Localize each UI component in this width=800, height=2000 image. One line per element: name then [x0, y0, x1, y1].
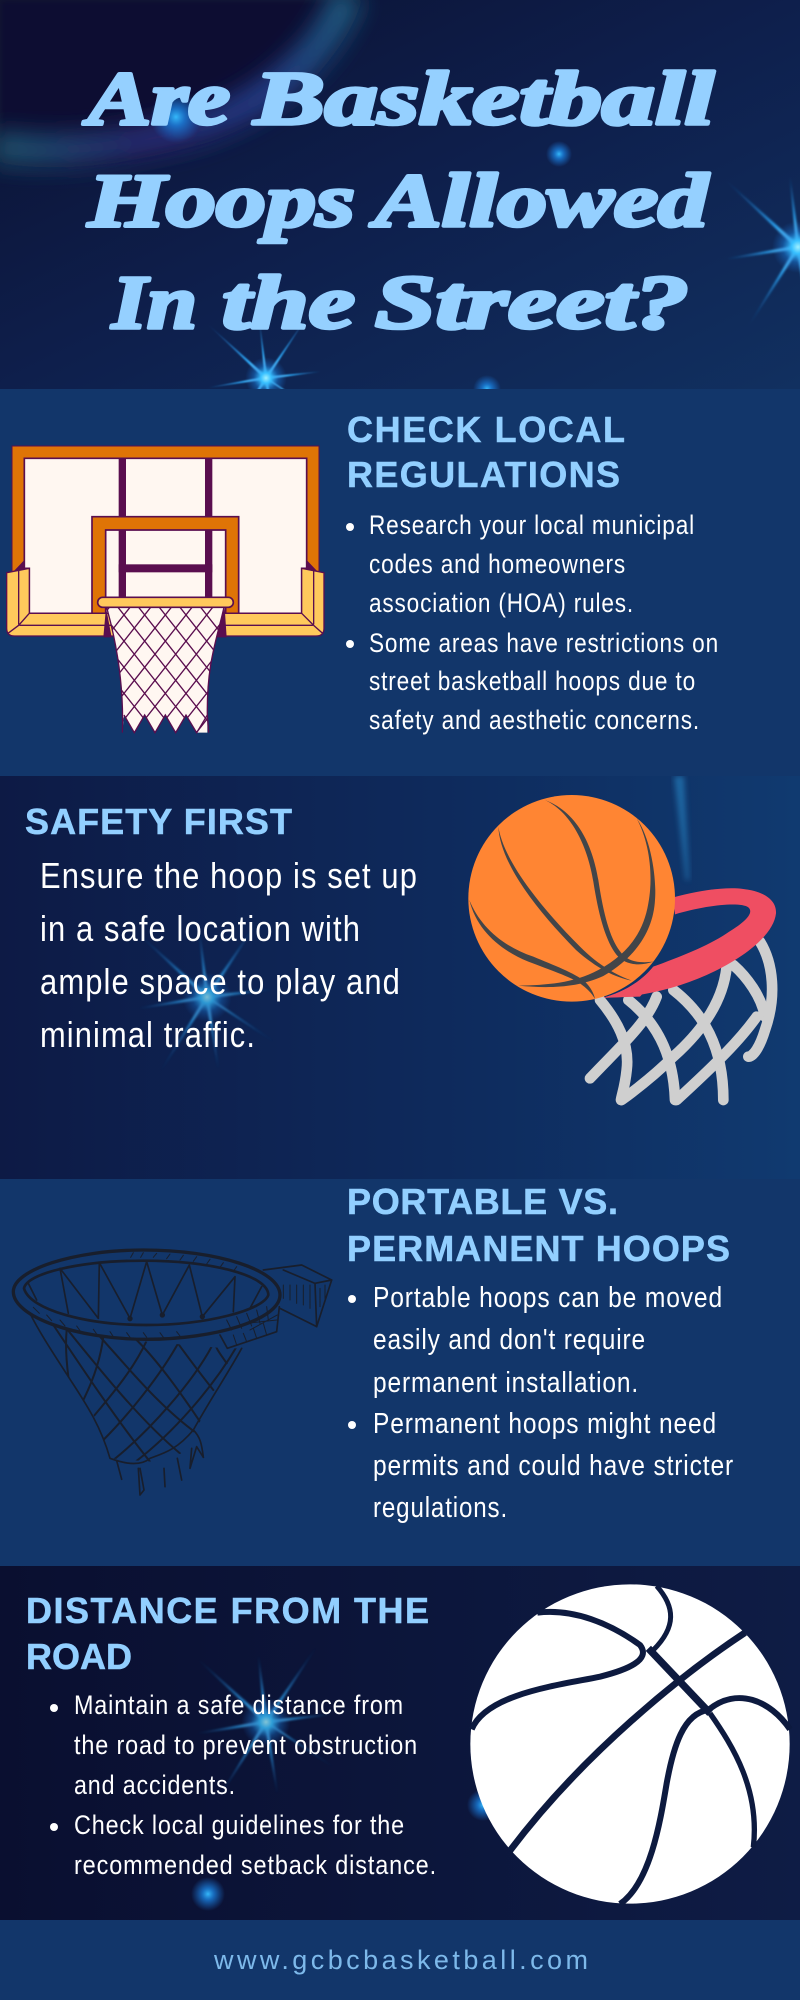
bullet list: distance: and accidents. — [74, 1770, 236, 1800]
heading: check local regulations — [347, 409, 625, 495]
title: Are — [83, 57, 230, 141]
panel: hero header — [0, 0, 800, 389]
bullet list: regulations: Some areas have restrictions on — [369, 628, 719, 658]
icon: backboard and hoop — [7, 446, 324, 733]
icon: sketched hoop and net — [13, 1250, 332, 1495]
icon: orange ball entering hoop — [468, 795, 776, 1100]
footer background — [0, 1920, 800, 2000]
panel: portable vs permanent hoops — [12, 1188, 733, 1523]
panel: footer — [0, 1920, 800, 2000]
heading: distance from the road — [26, 1590, 429, 1677]
bullet list: hoop types: Portable hoops can be moved — [373, 1282, 723, 1314]
bullet list: regulations: street basketball hoops due to — [369, 666, 696, 696]
bullet list: distance — [50, 1690, 437, 1880]
panel background — [0, 1179, 800, 1566]
heading: portable vs permanent hoops: PERMANENT HOOPS — [347, 1228, 730, 1269]
hero sparkles — [150, 91, 800, 442]
title: Street? — [375, 261, 689, 345]
heading: portable vs permanent hoops — [347, 1181, 730, 1269]
body text: safety: minimal traffic. — [40, 1014, 256, 1055]
bullet list: hoop types: easily and don't require — [373, 1324, 646, 1356]
heading: check local regulations: REGULATIONS — [347, 454, 620, 495]
hero background — [0, 0, 800, 389]
title: the — [222, 261, 355, 345]
panel background — [0, 776, 800, 1179]
heading: distance from the road: ROAD — [26, 1636, 132, 1677]
body text: safety — [40, 855, 418, 1055]
bullet list: distance: Maintain a safe distance from — [74, 1690, 404, 1720]
panel: distance from the road — [0, 1566, 800, 1920]
panel: check local regulations — [6, 416, 717, 734]
bullet list: regulations: Research your local municipal — [369, 510, 695, 540]
heading: safety first: SAFETY FIRST — [25, 801, 292, 842]
bullet list: hoop types: permits and could have stricter — [373, 1450, 734, 1482]
bullet list: hoop types — [348, 1282, 734, 1524]
bullet list: hoop types: Permanent hoops might need — [373, 1408, 717, 1440]
title: Hoops — [87, 159, 355, 243]
bullet list: regulations: association (HOA) rules. — [369, 588, 634, 618]
panel: safety first — [0, 776, 800, 1179]
sparkles — [133, 776, 689, 1073]
heading: check local regulations: CHECK LOCAL — [347, 409, 625, 450]
title: Basketball — [253, 57, 714, 141]
bullet list: hoop types: regulations. — [373, 1492, 508, 1524]
website address: www.gcbcbasketball.com — [213, 1945, 588, 1975]
bullet list: regulations — [346, 510, 719, 735]
body text: safety: Ensure the hoop is set up — [40, 855, 418, 896]
panel background — [0, 389, 800, 776]
heading: distance from the road: DISTANCE FROM THE — [26, 1590, 429, 1631]
title — [83, 57, 714, 345]
title: In — [111, 261, 197, 345]
title: Allowed — [370, 159, 709, 243]
bullet list: distance: Check local guidelines for the — [74, 1810, 405, 1840]
hero glow arc — [0, 0, 362, 167]
bullet list: regulations: safety and aesthetic concerns. — [369, 705, 700, 735]
bullet list: distance: the road to prevent obstruction — [74, 1730, 418, 1760]
bullet list: regulations: codes and homeowners — [369, 549, 626, 579]
bullet list: hoop types: permanent installation. — [373, 1367, 639, 1399]
icon: white basketball — [470, 1584, 790, 1904]
body text: safety: ample space to play and — [40, 961, 401, 1002]
bullet list: distance: recommended setback distance. — [74, 1850, 437, 1880]
panel background — [0, 1566, 800, 1920]
sparkles — [191, 1644, 499, 1911]
body text: safety: in a safe location with — [40, 908, 361, 949]
heading: portable vs permanent hoops: PORTABLE VS. — [347, 1181, 618, 1222]
